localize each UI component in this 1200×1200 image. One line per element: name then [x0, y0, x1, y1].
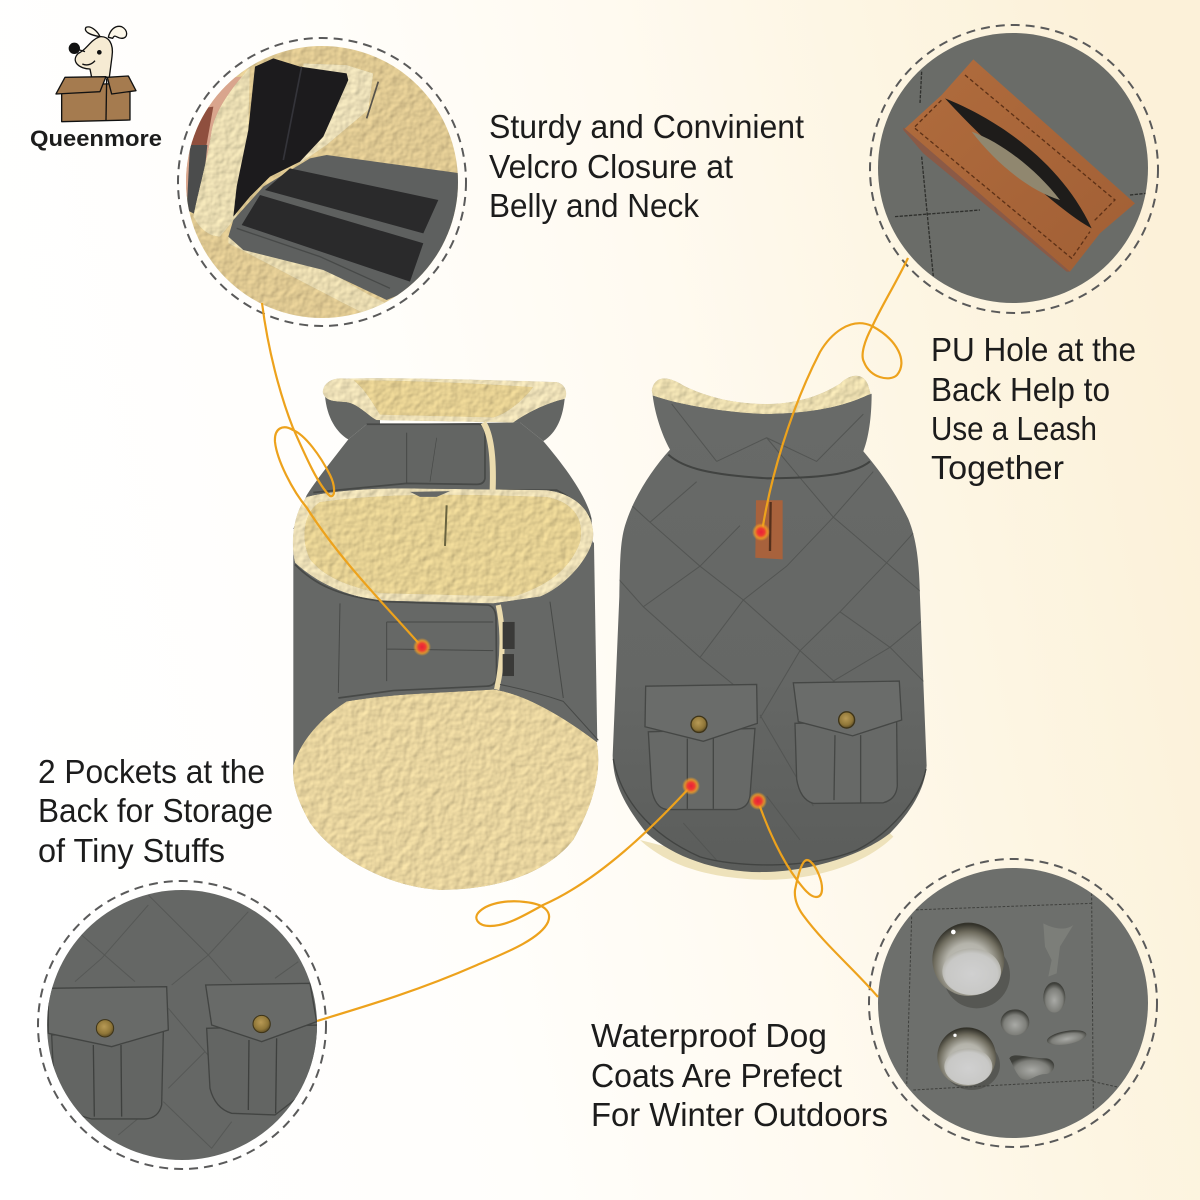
arrow: PU hole leader line — [762, 258, 908, 532]
panel: waterproof detail — [860, 859, 1160, 1160]
marker: PU hole — [752, 523, 770, 541]
upper fleece lining — [293, 488, 593, 603]
heading: velcro closure: Sturdy and Convinient — [489, 108, 804, 145]
heading: PU hole: PU Hole at the — [931, 331, 1136, 368]
fleece hem — [640, 833, 893, 880]
heading: waterproof: Waterproof Dog — [591, 1017, 827, 1054]
marker: pocket — [682, 777, 700, 795]
panel: velcro closure detail — [170, 30, 470, 330]
collar fleece — [323, 378, 566, 423]
icon: dog in box — [56, 26, 136, 122]
heading: pockets: of Tiny Stuffs — [38, 832, 225, 869]
heading: velcro closure: Belly and Neck — [489, 187, 699, 224]
illustration: coat inner view — [293, 378, 598, 890]
heading: velcro closure: Velcro Closure at — [489, 148, 733, 185]
pocket right — [793, 681, 902, 803]
velcro tabs — [503, 622, 515, 676]
pocket left — [645, 684, 757, 810]
neck strap — [313, 423, 591, 519]
logo wordmark: Queenmore — [30, 126, 162, 151]
heading: pockets: Back for Storage — [38, 792, 273, 829]
panel: pockets detail — [35, 875, 335, 1175]
leather tag — [755, 500, 783, 559]
belly strap — [295, 564, 598, 740]
quilting — [610, 404, 927, 860]
arrow: waterproof leader line — [758, 801, 878, 997]
collar seam — [668, 455, 870, 478]
collar fleece trim — [652, 376, 871, 414]
arrow: velcro leader line — [262, 303, 422, 647]
hem seam — [613, 759, 926, 865]
panel: PU leash hole detail — [870, 20, 1170, 320]
heading: PU hole: Use a Leash — [931, 410, 1097, 447]
illustration: coat outer view — [610, 376, 927, 880]
heading: waterproof: For Winter Outdoors — [591, 1096, 888, 1133]
coat ears and shoulders — [293, 395, 594, 570]
marker: velcro — [413, 638, 431, 656]
logo: Queenmore — [30, 26, 162, 151]
coat body — [613, 394, 927, 872]
heading: PU hole: Back Help to — [931, 371, 1110, 408]
marker: waterproof — [749, 792, 767, 810]
lower fleece lining — [293, 690, 598, 890]
heading: waterproof: Coats Are Prefect — [591, 1057, 842, 1094]
heading: pockets: 2 Pockets at the — [38, 753, 265, 790]
arrow: pockets leader line — [317, 786, 691, 1021]
heading: PU hole: Together — [931, 449, 1064, 486]
waist shell — [293, 543, 597, 771]
